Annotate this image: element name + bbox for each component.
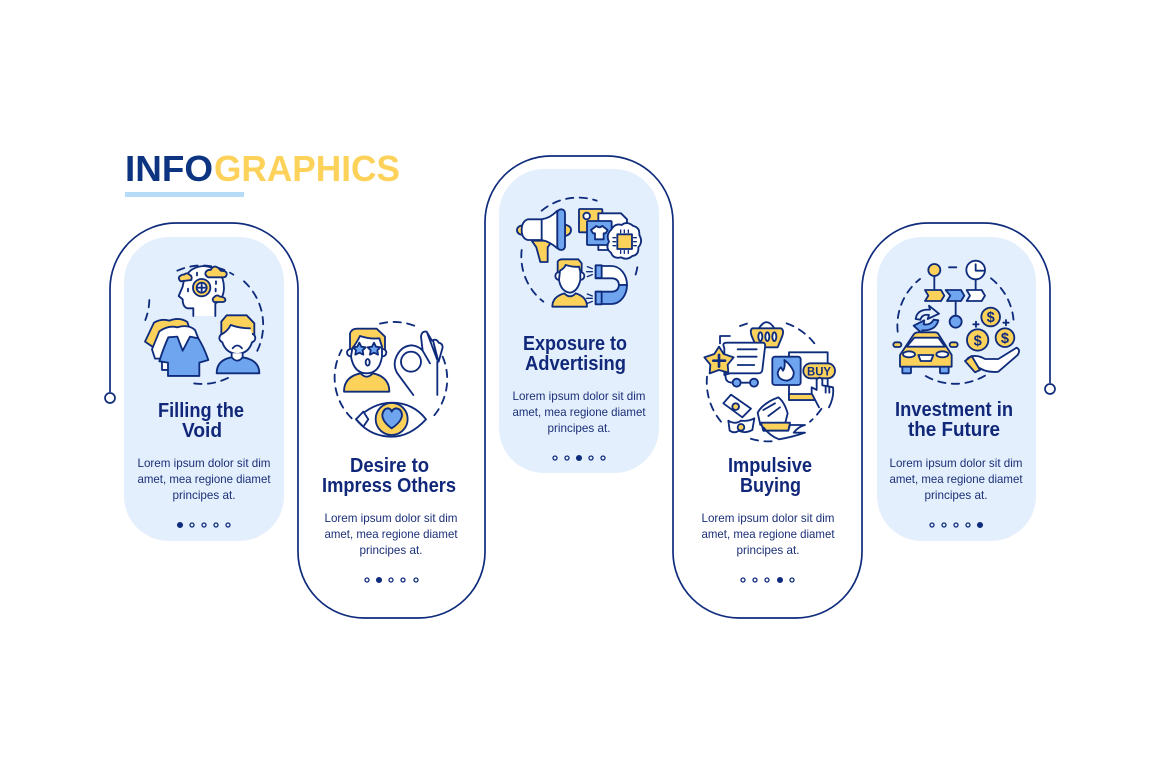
heading — [523, 333, 627, 375]
heading: Void — [182, 420, 222, 442]
heading: the Future — [908, 419, 1000, 441]
body text — [702, 511, 835, 557]
body text — [512, 389, 646, 435]
body text — [324, 511, 458, 557]
heading — [728, 455, 812, 497]
heading: Desire to — [350, 455, 429, 477]
step dots — [741, 578, 794, 582]
heading: Impress Others — [322, 475, 456, 497]
icon: timeline, car, coins and hand — [893, 261, 1019, 384]
heading: Advertising — [525, 353, 626, 375]
connecting outline — [105, 156, 1055, 618]
icon: cart, buy button and cash: BUY — [807, 365, 831, 379]
heading: Buying — [740, 475, 801, 497]
step dots — [553, 456, 605, 460]
body text: amet, mea regione diamet — [324, 527, 458, 541]
body text: Lorem ipsum dolor sit dim — [890, 456, 1022, 470]
body text: Lorem ipsum dolor sit dim — [702, 511, 834, 525]
title: GRAPHICS — [214, 148, 400, 189]
title — [125, 148, 400, 197]
body text: principes at. — [736, 543, 800, 557]
panel: impulsive buying — [702, 322, 835, 582]
heading: Filling the — [158, 400, 244, 422]
body text — [138, 456, 271, 502]
heading — [322, 455, 456, 497]
title: INFO — [125, 148, 213, 189]
icon: timeline, car, coins and hand: $ — [1001, 331, 1009, 347]
panel: filling the void — [124, 237, 284, 541]
step dots — [930, 523, 982, 527]
body text: amet, mea regione diamet — [702, 527, 835, 541]
body text: principes at. — [172, 488, 236, 502]
body text: principes at. — [548, 421, 610, 435]
body text: amet, mea regione diamet — [890, 472, 1023, 486]
icon: megaphone, ads and magnet — [517, 198, 641, 307]
panel: investment in the future — [877, 237, 1036, 541]
icon: cart, buy button and cash — [704, 322, 835, 441]
panel: exposure to advertising — [499, 169, 659, 473]
step dots — [365, 578, 418, 582]
panel: desire to impress others — [322, 322, 458, 582]
body text: Lorem ipsum dolor sit dim — [324, 511, 458, 525]
heading: Impulsive — [728, 455, 812, 477]
body text: Lorem ipsum dolor sit dim — [138, 456, 270, 470]
body text: principes at. — [360, 543, 422, 557]
heading: Investment in — [895, 399, 1013, 421]
icon: timeline, car, coins and hand: $ — [987, 310, 995, 326]
body text — [890, 456, 1023, 502]
icon: head, shirts and sad person — [145, 265, 263, 384]
heading: Exposure to — [523, 333, 627, 355]
body text: principes at. — [924, 488, 988, 502]
body text: Lorem ipsum dolor sit dim — [512, 389, 646, 403]
step dots — [178, 523, 230, 527]
body text: amet, mea regione diamet — [138, 472, 271, 486]
heading — [158, 400, 244, 442]
body text: amet, mea regione diamet — [512, 405, 646, 419]
heading — [895, 399, 1013, 441]
icon: timeline, car, coins and hand: $ — [974, 333, 982, 349]
icon: admiring person, ok hand and heart eye — [335, 322, 447, 437]
